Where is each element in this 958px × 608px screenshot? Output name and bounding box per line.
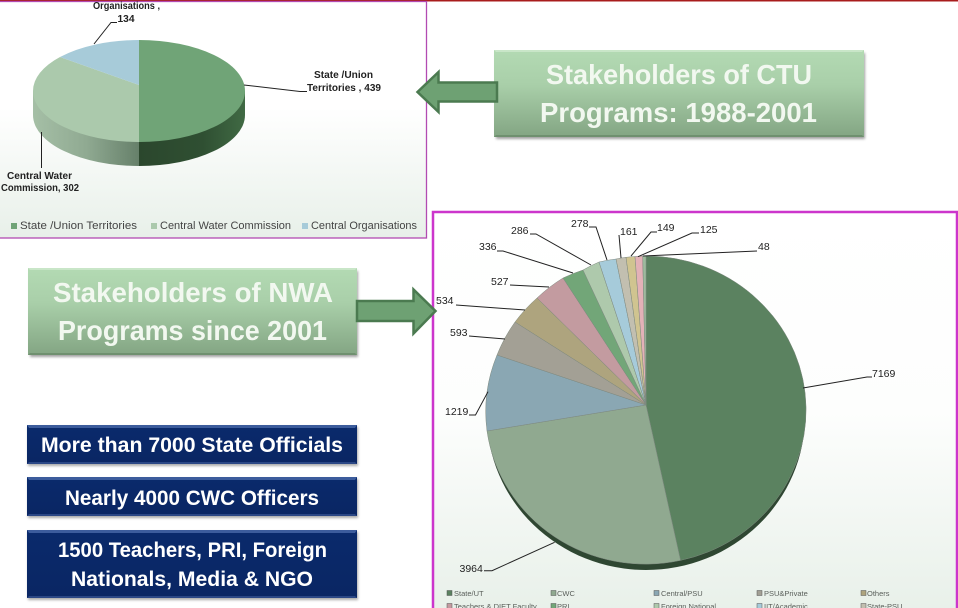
data labels: NWA pie: 336: [479, 241, 497, 253]
legend: NWA chart: Others: [867, 589, 890, 598]
pie chart: NWA programs: [486, 256, 806, 570]
callout: state officials: More than 7000 State Officials: [41, 434, 343, 457]
data labels: NWA pie: 534: [436, 295, 454, 307]
label: state and union territories: [244, 70, 381, 94]
legend: CTU chart: Central Organisations: [311, 220, 417, 232]
legend: NWA chart: CWC: [557, 589, 575, 598]
legend: NWA chart: [447, 589, 902, 608]
label: state and union territories: State /Union: [314, 70, 373, 81]
callout: teachers, PRI, foreign nationals, media and NGO: [27, 530, 358, 600]
data labels: NWA pie: 527: [491, 276, 509, 288]
data labels: NWA pie: 593: [450, 327, 468, 339]
heading: Stakeholders of NWA Programs: Programs since 2001: [58, 315, 327, 346]
callout: CWC officers: [27, 477, 358, 518]
callout: teachers, PRI, foreign nationals, media and NGO: 1500 Teachers, PRI, Foreign: [58, 539, 327, 562]
callout: CWC officers: Nearly 4000 CWC Officers: [65, 487, 319, 510]
label: central water commission: Commission, 302: [1, 183, 79, 194]
data labels: NWA pie: 286: [511, 225, 529, 237]
data labels: NWA pie: 1219: [445, 406, 469, 418]
heading: Stakeholders of NWA Programs: [28, 268, 358, 357]
legend: NWA chart: PSU&Private: [764, 589, 808, 598]
panel: CTU stakeholders chart: [0, 1, 426, 238]
arrow: NWA box to bottom chart: [357, 290, 436, 334]
arrow: CTU box to top chart: [418, 72, 497, 112]
legend: CTU chart: [11, 220, 417, 232]
data labels: NWA pie: 7169: [872, 368, 896, 380]
label: central organisations: [93, 1, 160, 44]
data labels: NWA pie: 161: [620, 226, 638, 238]
label: central organisations: 134: [118, 14, 135, 25]
legend: CTU chart: State /Union Territories: [20, 220, 138, 232]
heading: Stakeholders of NWA Programs: Stakeholders of NWA: [53, 277, 333, 308]
data labels: NWA pie: [436, 218, 896, 575]
data labels: NWA pie: 278: [571, 218, 589, 230]
legend: NWA chart: Central/PSU: [661, 589, 703, 598]
data labels: NWA pie: 125: [700, 224, 718, 236]
data labels: NWA pie: 48: [758, 241, 770, 253]
legend: CTU chart: Central Water Commission: [160, 220, 291, 232]
callout: state officials: [27, 425, 358, 466]
panel: NWA stakeholders chart: [433, 212, 957, 608]
label: central water commission: Central Water: [7, 171, 72, 182]
label: state and union territories: Territories , 439: [307, 83, 381, 94]
3D pie chart: CTU programs: [33, 40, 245, 166]
label: central organisations: Organisations ,: [93, 1, 160, 12]
data labels: NWA pie: 149: [657, 222, 675, 234]
top red rule: [0, 0, 958, 2]
data labels: NWA pie: 3964: [460, 563, 483, 575]
heading: Stakeholders of CTU Programs: Programs: 1988-2001: [540, 97, 817, 128]
label: central water commission: [1, 132, 79, 194]
legend: NWA chart: State/UT: [454, 589, 484, 598]
heading: Stakeholders of CTU Programs: Stakeholders of CTU: [546, 59, 812, 90]
callout: teachers, PRI, foreign nationals, media and NGO: Nationals, Media & NGO: [71, 568, 313, 591]
heading: Stakeholders of CTU Programs: [494, 50, 865, 139]
